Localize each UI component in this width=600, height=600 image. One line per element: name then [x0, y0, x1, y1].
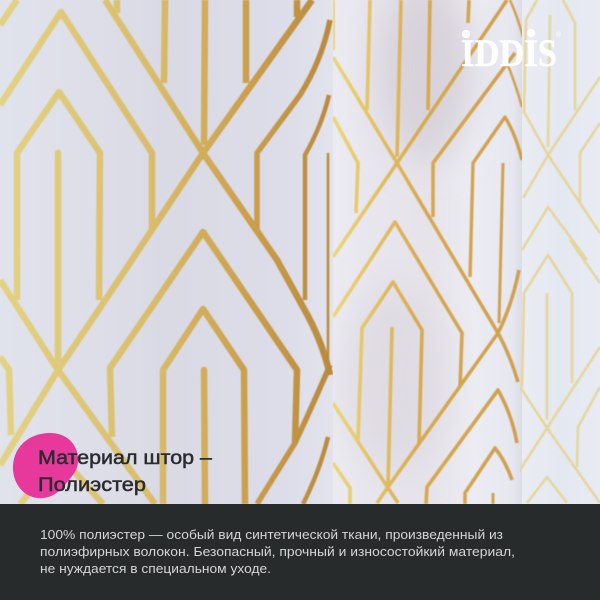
panel: middle curtain fold	[333, 0, 523, 504]
title	[38, 448, 212, 496]
logo: IDDIS: IDDIS	[461, 32, 557, 75]
description text: 100% полиэстер — особый вид синтетической ткани, произведенный из	[40, 527, 503, 542]
panel: left curtain fold	[0, 0, 334, 504]
panel: dark description bar	[0, 504, 600, 600]
title: Материал штор –	[38, 448, 212, 469]
title: Полиэстер	[38, 475, 146, 496]
logo: IDDIS: ®	[556, 31, 562, 39]
description text: полиэфирных волокон. Безопасный, прочный и износостойкий материал,	[40, 544, 515, 559]
description text: не нуждается в специальном уходе.	[40, 561, 271, 576]
panel: right curtain fold	[518, 0, 600, 504]
description text	[40, 527, 515, 576]
pink blob accent	[13, 433, 78, 498]
